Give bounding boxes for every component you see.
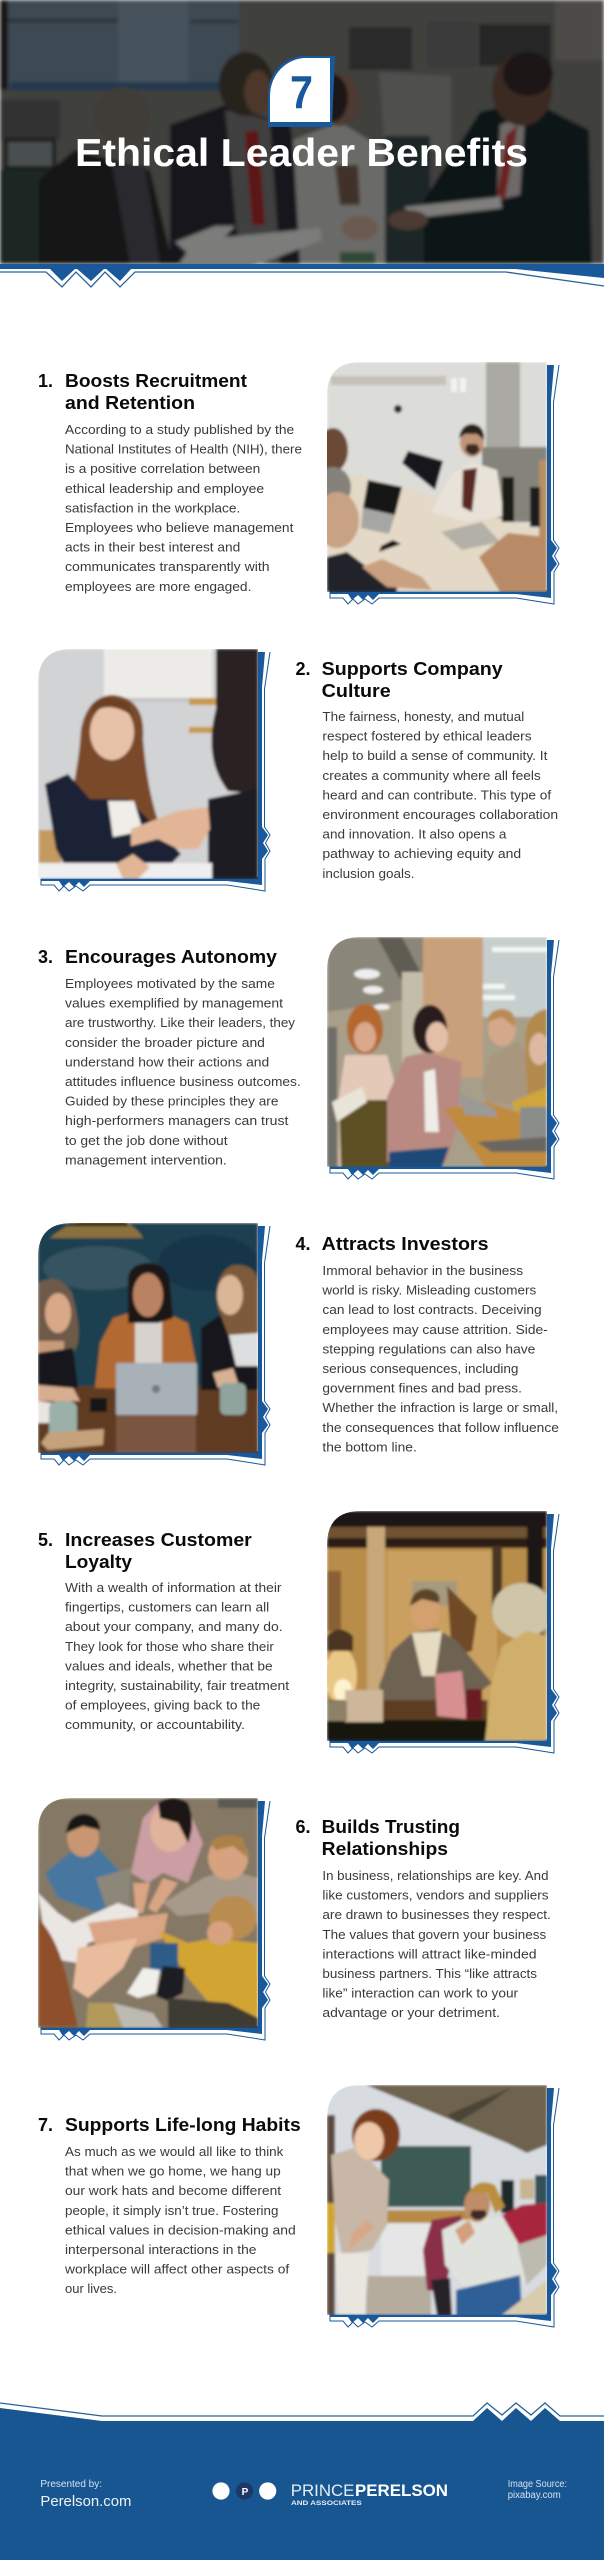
text block: benefit 6: The values that govern your business [322,1927,547,1942]
text block: benefit 2: respect fostered by ethical leaders [322,729,532,744]
heading: benefit 4: Attracts Investors [322,1234,488,1254]
header [0,0,604,290]
text block: benefit 6: advantage or your detriment. [322,2005,500,2020]
logo: Prince Perelson and Associates: AND ASSOCIATES [291,2500,363,2507]
text block: benefit 6: are drawn to businesses they respect. [322,1907,551,1922]
heading: benefit 2: Supports Company [322,659,503,679]
text block: benefit 3: management intervention. [65,1152,227,1167]
panel: benefit 6 [38,1798,551,2040]
panel: benefit 5 [38,1511,559,1753]
text block: benefit 2: help to build a sense of community. It [322,748,548,763]
heading: benefit 3: Encourages Autonomy [65,947,277,967]
text block: benefit 7: that when we go home, we hang up [65,2164,281,2179]
text block: benefit 4: employees may cause attrition. Side- [322,1322,548,1337]
text block: benefit 5: about your company, and many do. [65,1619,283,1634]
title: Ethical Leader Benefits [75,132,528,175]
logo: Prince Perelson and Associates: PERELSON [355,2481,448,2500]
text block: benefit 6: In business, relationships are key. And [322,1868,548,1883]
logo: Prince Perelson and Associates [212,2481,448,2507]
presented by [40,2478,131,2510]
text block: benefit 5 [65,1580,290,1732]
photo: handshake [38,649,270,891]
heading: benefit 5: 5. [38,1530,53,1550]
text block: benefit 2: The fairness, honesty, and mutual [322,709,524,724]
text block: benefit 7: ethical values in decision-making and [65,2222,296,2237]
text block: benefit 5: With a wealth of information at their [65,1580,282,1595]
photo: team around a bar table [327,937,559,1179]
text block: benefit 7: our lives. [65,2281,117,2296]
logo: Prince Perelson and Associates: P [242,2487,249,2498]
heading: benefit 6: Builds Trusting [322,1817,460,1837]
text block: benefit 5: integrity, sustainability, fair treatment [65,1678,290,1693]
text block: benefit 1: Employees who believe management [65,520,294,535]
text block: benefit 4: world is risky. Misleading customers [321,1283,537,1298]
photo: meeting at white table [315,362,559,604]
text block: benefit 7: our work hats and become different [65,2183,282,2198]
text block: benefit 3: to get the job done without [65,1133,228,1148]
text block: benefit 4: serious consequences, including [322,1361,518,1376]
heading: benefit 5: Increases Customer [65,1530,252,1550]
panel: benefit 1 [38,362,559,604]
photo: colleagues in an office [327,2085,559,2327]
text block: benefit 5: They look for those who share their [65,1639,274,1654]
photo: three women at a laptop [38,1221,270,1465]
text block: benefit 1: National Institutes of Health (NIH), there [65,442,302,457]
text block: benefit 2: inclusion goals. [322,866,414,881]
heading: benefit 2: Culture [322,681,391,701]
text block: benefit 7: As much as we would all like to think [65,2144,284,2159]
text block: benefit 5: community, or accountability. [65,1717,245,1732]
heading: benefit 2 [296,659,503,701]
text block: benefit 2: environment encourages collaboration [322,807,558,822]
photo: shop counter [325,1511,559,1753]
heading: benefit 6: 6. [296,1817,311,1837]
heading: benefit 6: Relationships [322,1839,448,1859]
text block: benefit 2: heard and can contribute. This type of [322,787,552,802]
text block: benefit 3 [65,976,301,1167]
panel: benefit 3 [38,937,559,1179]
panel: benefit 4 [38,1221,559,1465]
text block: benefit 3: consider the broader picture and [65,1035,265,1050]
text block: benefit 6: business partners. This “like attracts [322,1966,538,1981]
text block: benefit 1 [65,422,302,594]
heading: benefit 4: 4. [296,1234,311,1254]
text block: benefit 3: Employees motivated by the same [65,976,275,991]
text block: benefit 1: is a positive correlation between [65,461,260,476]
header photo [0,0,604,290]
text block: benefit 3: high-performers managers can trust [65,1113,289,1128]
text block: benefit 1: According to a study published by the [65,422,294,437]
text block: benefit 4: the bottom line. [322,1439,417,1454]
heading: benefit 7: 7. [38,2115,53,2135]
footer [0,2403,604,2560]
text block: benefit 6: like customers, vendors and suppliers [322,1888,549,1903]
heading: benefit 5 [38,1530,252,1572]
text block: benefit 4: stepping regulations can also have [322,1341,535,1356]
text block: benefit 4: government fines and bad press. [322,1381,522,1396]
text block: benefit 4: Immoral behavior in the business [322,1263,524,1278]
text block: benefit 1: acts in their best interest and [65,540,240,555]
text block: benefit 3: understand how their actions and [65,1054,269,1069]
text block: benefit 7: workplace will affect other aspects of [64,2262,290,2277]
text block: benefit 1: satisfaction in the workplace. [65,500,240,515]
badge: number 7: 7 [290,66,313,118]
text block: benefit 2: pathway to achieving equity and [322,846,521,861]
text block: benefit 2: creates a community where all feels [322,768,541,783]
text block: benefit 5: of employees, giving back to the [65,1698,260,1713]
badge: number 7 [268,56,335,127]
text block: benefit 6: interactions will attract like-minded [322,1946,537,1961]
text block: benefit 6: like” interaction can work to your [322,1986,519,2001]
heading: benefit 3: 3. [38,947,53,967]
image source: pixabay.com [508,2490,561,2501]
heading: benefit 1 [38,371,247,413]
text block: benefit 7 [64,2144,296,2296]
text block: benefit 1: communicates transparently with [65,559,270,574]
text block: benefit 4: the consequences that follow influence [322,1420,559,1435]
text block: benefit 4 [321,1263,559,1454]
text block: benefit 3: Guided by these principles they are [65,1094,278,1109]
presented by: Presented by: [40,2478,102,2490]
text block: benefit 7: people, it simply isn’t true. Fostering [65,2203,278,2218]
heading: benefit 6 [296,1817,460,1859]
text block: benefit 3: are trustworthy. Like their leaders, they [65,1015,296,1030]
image source: Image Source: [508,2479,567,2490]
text block: benefit 1: employees are more engaged. [65,579,251,594]
text block: benefit 7: interpersonal interactions in the [65,2242,256,2257]
image source [508,2479,567,2501]
footer band with zigzag [0,2403,604,2560]
heading: benefit 1: Boosts Recruitment [65,371,247,391]
text block: benefit 5: values and ideals, whether that be [65,1658,273,1673]
panel: benefit 7 [38,2085,559,2327]
text block: benefit 5: fingertips, customers can learn all [65,1600,269,1615]
text block: benefit 4: Whether the infraction is large or small, [322,1400,558,1415]
text block: benefit 6 [322,1868,551,2020]
text block: benefit 2: and innovation. It also opens a [322,827,507,842]
heading: benefit 1: 1. [38,371,53,391]
logo: Prince Perelson and Associates: PRINCE [291,2481,354,2500]
heading: benefit 1: and Retention [65,393,195,413]
header band and zigzag [0,264,604,287]
panel: benefit 2 [38,649,558,891]
text block: benefit 3: values exemplified by management [65,996,283,1011]
photo: team hands together [38,1798,270,2040]
presented by: Perelson.com [40,2493,131,2510]
heading: benefit 5: Loyalty [65,1552,132,1572]
text block: benefit 4: can lead to lost contracts. Deceiving [322,1302,542,1317]
heading: benefit 2: 2. [296,659,311,679]
text block: benefit 2 [322,709,558,881]
text block: benefit 1: ethical leadership and employee [65,481,264,496]
text block: benefit 3: attitudes influence business outcomes. [65,1074,301,1089]
heading: benefit 7: Supports Life-long Habits [65,2115,301,2135]
